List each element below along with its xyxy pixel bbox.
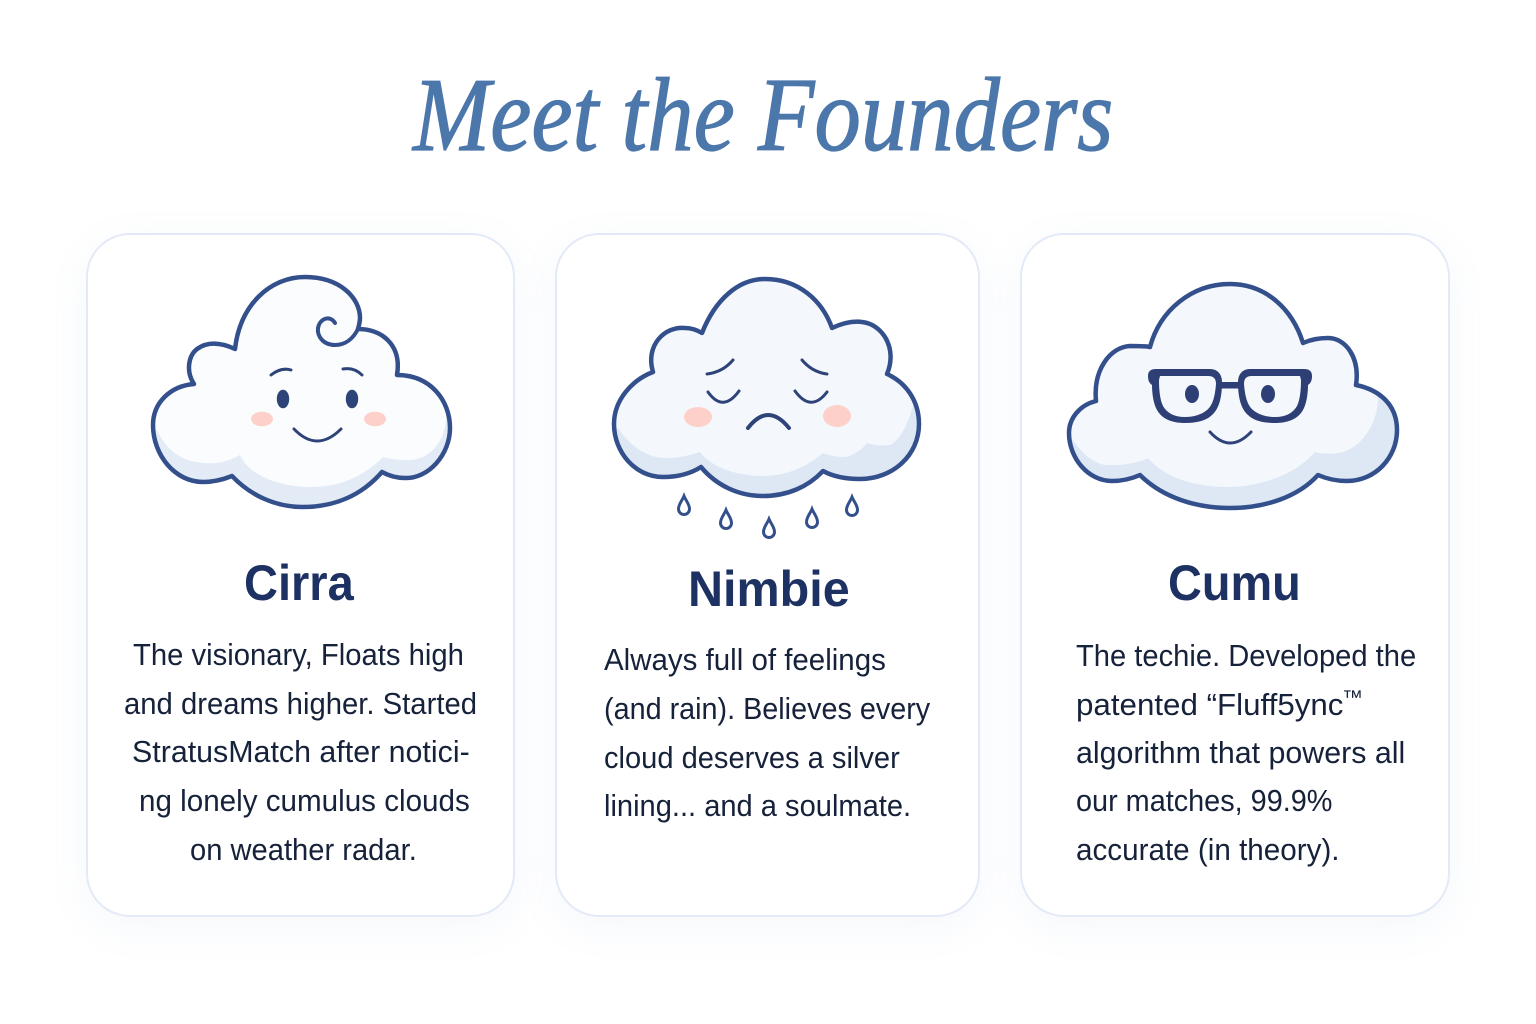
text: Nimbie bio: (and rain). Believes every <box>604 691 930 726</box>
text: Cumu bio: ™ <box>1342 687 1363 709</box>
icon: Cumu cloud <box>1066 282 1400 510</box>
heading: Cumu: Cumu <box>1168 555 1301 611</box>
text: Cumu bio: The techie. Developed the <box>1076 638 1416 673</box>
panel: Cumu <box>1020 233 1450 917</box>
text: Cirra bio: StratusMatch after notici- <box>132 734 470 769</box>
text: Cumu bio: patented “Fluff5ync <box>1076 687 1343 722</box>
panel: Nimbie <box>555 233 980 917</box>
text: Cirra bio: and dreams higher. Started <box>124 686 477 721</box>
text: Cumu bio: accurate (in theory). <box>1076 832 1340 867</box>
icon: Cirra cloud <box>150 274 452 510</box>
text: Cumu bio <box>1076 638 1416 867</box>
text: Cirra bio: The visionary, Floats high <box>133 637 464 672</box>
text: Cirra bio: ng lonely cumulus clouds <box>139 783 470 818</box>
panel: Cirra <box>86 233 515 917</box>
icon: Nimbie cloud <box>612 276 922 539</box>
text: Nimbie bio <box>604 642 930 823</box>
text: Cirra bio: on weather radar. <box>190 832 417 867</box>
text: Nimbie bio: Always full of feelings <box>604 642 886 677</box>
text: Nimbie bio: lining... and a soulmate. <box>604 788 911 823</box>
title: Meet the Founders <box>413 56 1113 173</box>
text: Nimbie bio: cloud deserves a silver <box>604 740 900 775</box>
text: Cirra bio <box>124 637 477 867</box>
text: Cumu bio: algorithm that powers all <box>1076 735 1405 770</box>
heading: Cirra: Cirra <box>244 555 354 611</box>
text: Cumu bio: our matches, 99.9% <box>1076 783 1332 818</box>
heading: Nimbie: Nimbie <box>688 561 850 617</box>
